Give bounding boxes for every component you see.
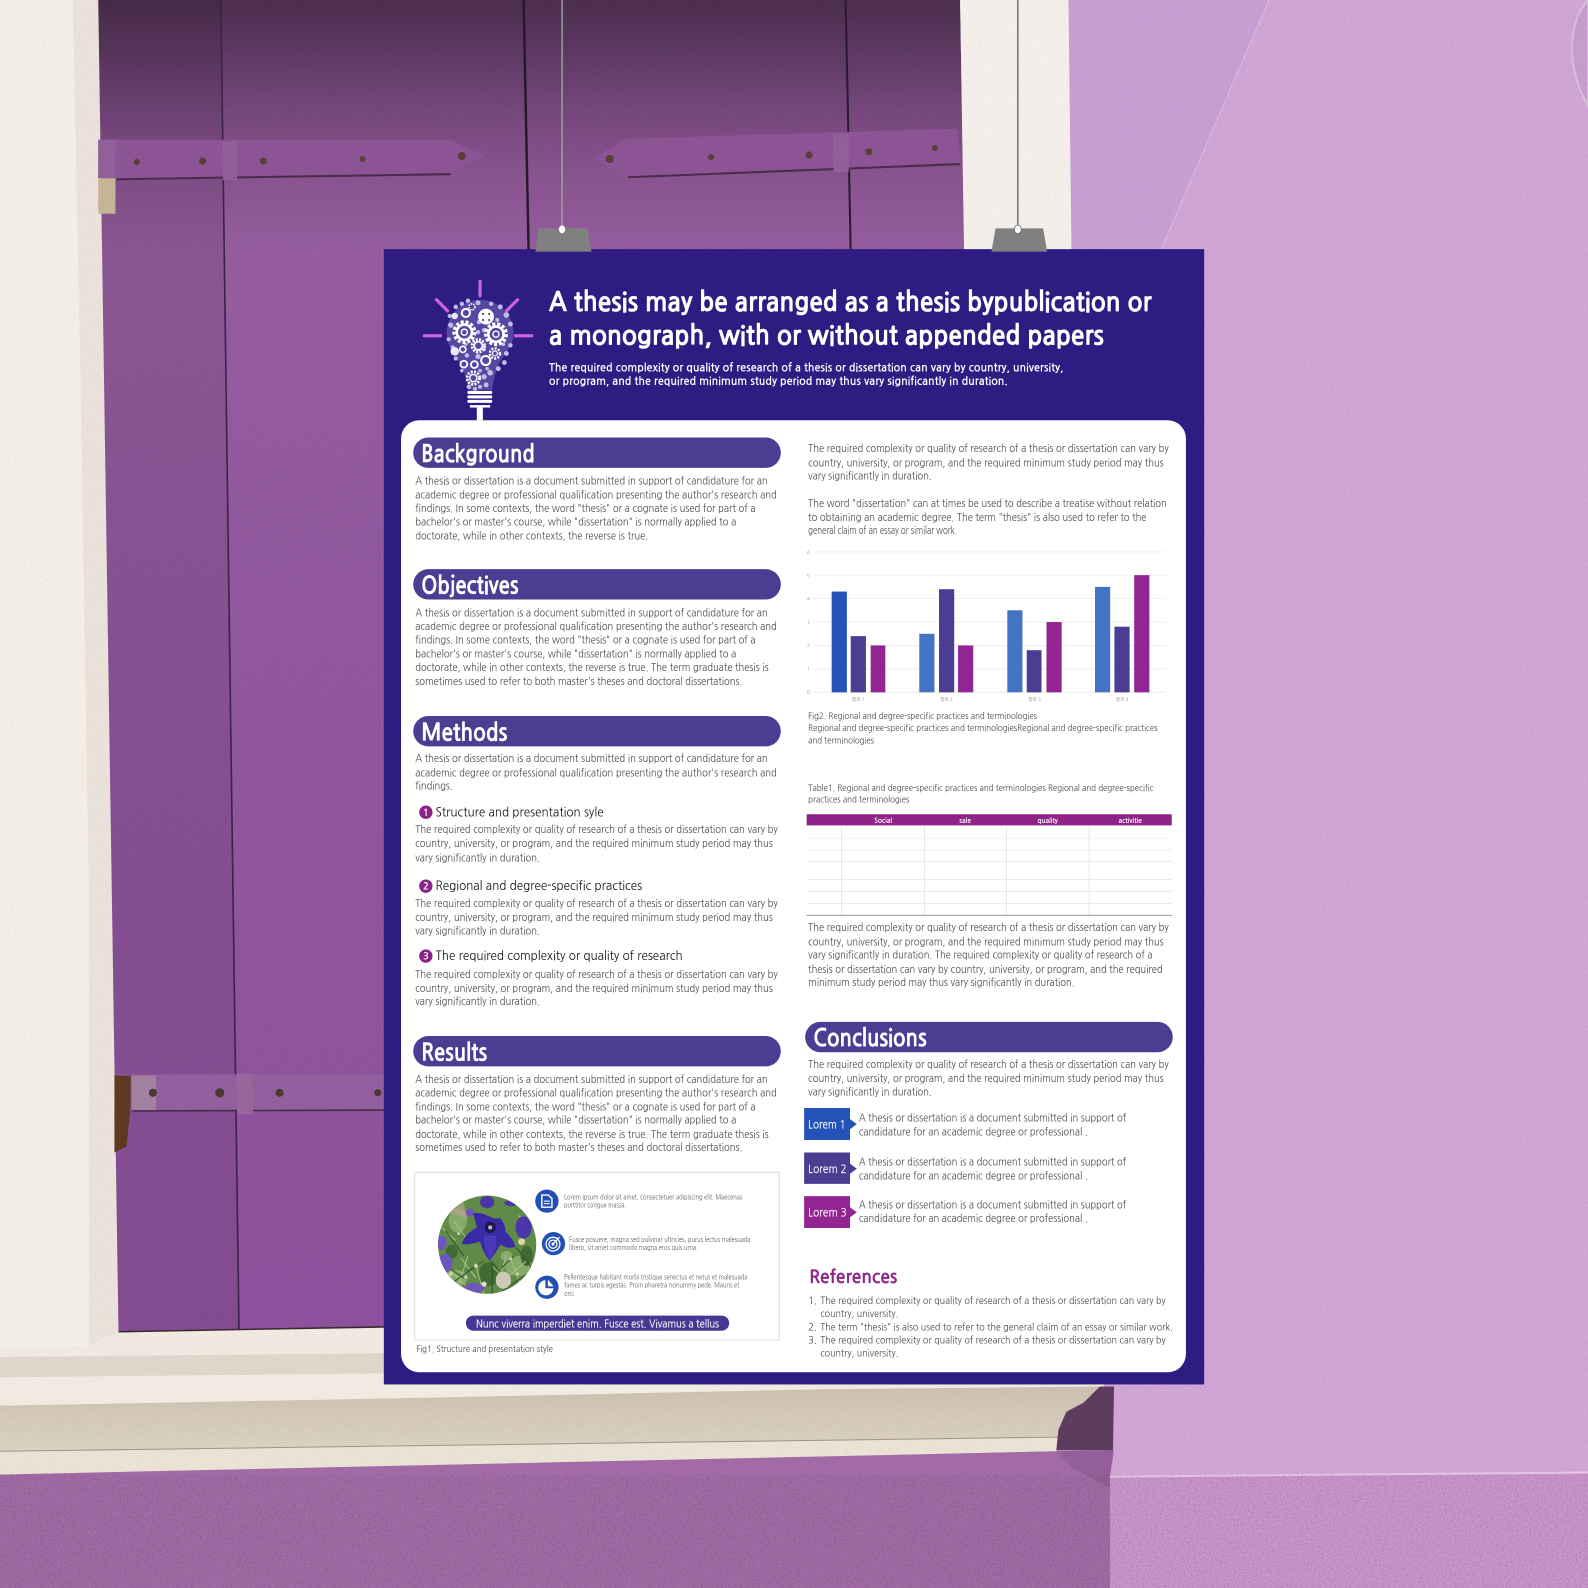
poster panel (384, 249, 1204, 1384)
subsection 3 text: vary significantly in duration. (415, 996, 540, 1007)
icon: pie chart (535, 1276, 559, 1299)
text: right intro paragraph 2: The word "dissertation" can at times be used to describe a treatise without relation (808, 498, 1167, 509)
text: Objectives body: bachelor's or master's course, while "dissertation" is normally applied to a (415, 648, 736, 659)
text: item 1 (564, 1194, 742, 1209)
text: Background body: doctorate, while in other contexts, the reverse is true. (415, 530, 648, 541)
bar chart: 항목 3 (1028, 697, 1041, 702)
subtitle (549, 362, 1063, 387)
callout: Lorem 3: candidature for an academic degree or professional . (859, 1213, 1088, 1224)
text: item 3: orci. (564, 1290, 575, 1297)
text: right intro paragraph 1 (808, 443, 1169, 482)
subsection 1 text: country, university, or program, and the required minimum study period may thus (415, 838, 773, 849)
text: item 3 (564, 1274, 748, 1297)
bar chart: 항목 1 (852, 697, 865, 702)
text: right intro paragraph 2: general claim of an essay or similar work. (808, 525, 957, 536)
subsection 1 heading: 1 (423, 808, 429, 818)
subsection 1 text: The required complexity or quality of research of a thesis or dissertation can vary by (415, 824, 778, 835)
section: Conclusions (804, 1022, 1173, 1228)
reference list: country, university. (820, 1349, 898, 1359)
subtitle: The required complexity or quality of research of a thesis or dissertation can vary by country, university, (549, 362, 1063, 374)
caption: Fig1: Fig1. Structure and presentation style (416, 1345, 553, 1354)
bar chart: 항목 4 (1116, 697, 1129, 702)
callout: Lorem 2: A thesis or dissertation is a document submitted in support of (859, 1157, 1126, 1168)
icon: target (542, 1232, 565, 1255)
text: below table: The required complexity or quality of research of a thesis or dissertation can vary by (808, 922, 1169, 933)
heading: Objectives (413, 569, 781, 600)
heading: Conclusions: Conclusions (813, 1027, 927, 1050)
subsection 3 text: The required complexity or quality of research of a thesis or dissertation can vary by (415, 969, 778, 980)
subsection 3 heading: The required complexity or quality of research (435, 949, 683, 962)
text: Conclusions intro: country, university, or program, and the required minimum study period may thus (808, 1073, 1164, 1084)
text: Results body: A thesis or dissertation is a document submitted in support of candidature for an (415, 1074, 768, 1085)
icon: document (535, 1189, 559, 1213)
text: Methods intro (415, 753, 777, 791)
title: a monograph, with or without appended papers (549, 322, 1104, 348)
callout: Lorem 2 (804, 1153, 1126, 1184)
text: Conclusions intro: vary significantly in duration. (808, 1086, 932, 1097)
reference list: The required complexity or quality of research of a thesis or dissertation can vary by (820, 1295, 1166, 1306)
text: Conclusions intro: The required complexity or quality of research of a thesis or dissertation can vary by (808, 1059, 1169, 1070)
heading: Results (413, 1036, 781, 1066)
text: Conclusions intro (808, 1059, 1169, 1097)
table: Social (874, 817, 892, 824)
subsection 2 heading: Regional and degree-specific practices (435, 879, 642, 892)
callout: Lorem 2: candidature for an academic degree or professional . (859, 1170, 1088, 1181)
text: Background body: findings. In some contexts, the word "thesis" or a cognate is used for part of a (415, 503, 756, 514)
text: Background body: academic degree or professional qualification presenting the author's research and (415, 489, 777, 500)
bar chart: 5 (807, 573, 810, 578)
text: Objectives body: A thesis or dissertation is a document submitted in support of candidature for an (415, 607, 768, 618)
text: Methods intro: findings. (415, 780, 453, 791)
table: activitie (1119, 817, 1142, 824)
text: Background body: bachelor's or master's course, while "dissertation" is normally applied to a (415, 517, 736, 528)
reference list: 3. (808, 1335, 817, 1345)
text: Results body: bachelor's or master's course, while "dissertation" is normally applied to a (415, 1115, 736, 1126)
reference list: The term "thesis" is also used to refer to the general claim of an essay or similar work. (820, 1321, 1173, 1332)
bar chart: 0 (807, 690, 810, 695)
caption: Fig2: Regional and degree-specific practices and terminologiesRegional and degree-specific practices (808, 724, 1158, 733)
text: Results body: academic degree or professional qualification presenting the author's research and (415, 1087, 777, 1098)
section: Methods (413, 716, 781, 1007)
white content card (401, 420, 1186, 1372)
text: item 2 (569, 1236, 751, 1251)
bar chart: 4 (807, 597, 810, 602)
heading: References: References (809, 1268, 897, 1286)
text: item 1: Lorem ipsum dolor sit amet, consectetuer adipiscing elit. Maecenas (564, 1194, 742, 1201)
text: Background body (415, 476, 777, 541)
text: Results body: findings. In some contexts, the word "thesis" or a cognate is used for part of a (415, 1101, 756, 1112)
heading: Conclusions (805, 1022, 1173, 1052)
text: Methods intro: A thesis or dissertation is a document submitted in support of candidature for an (415, 753, 768, 764)
text: Background body: A thesis or dissertation is a document submitted in support of candidature for an (415, 476, 768, 487)
text: below table: country, university, or program, and the required minimum study period may thus (808, 936, 1164, 947)
text: right intro paragraph 1: vary significantly in duration. (808, 471, 932, 482)
caption: Table1: Table1. Regional and degree-specific practices and terminologies Regional and degree-specific (808, 784, 1154, 793)
callout: Lorem 1: Lorem 1 (808, 1119, 846, 1131)
text: Results body: doctorate, while in other contexts, the reverse is true. The term graduate thesis is (415, 1129, 769, 1140)
heading: Objectives: Objectives (421, 574, 519, 597)
callout: Lorem 1: A thesis or dissertation is a document submitted in support of (859, 1113, 1126, 1124)
subsection 2 heading: 2 (423, 882, 429, 892)
bar chart: 3 (807, 620, 810, 625)
photo: purple flower (435, 1193, 539, 1296)
title (549, 289, 1152, 348)
text: below table: thesis or dissertation can vary by country, university, or program, and the required (808, 964, 1163, 975)
hanging clip right (991, 0, 1047, 252)
caption: Fig2 (808, 712, 1158, 745)
bar chart (807, 550, 1166, 702)
text: right intro paragraph 2: to obtaining an academic degree. The term "thesis" is also used to refer to the (808, 512, 1147, 523)
subsection 1 text (415, 824, 778, 863)
text: below table: vary significantly in duration. The required complexity or quality of research of a (808, 950, 1153, 961)
text: item 3: Pellentesque habitant morbi tristique senectus et netus et malesuada (564, 1274, 748, 1281)
text: Objectives body (415, 607, 777, 687)
section: Background (413, 438, 781, 541)
subsection 3 text: country, university, or program, and the required minimum study period may thus (415, 983, 773, 994)
text: right intro paragraph 1: The required complexity or quality of research of a thesis or dissertation can vary by (808, 443, 1169, 454)
subsection 3 text (415, 969, 778, 1007)
section: References (808, 1268, 1173, 1359)
table: sale (959, 817, 971, 824)
caption: Table1 (808, 784, 1154, 805)
pill banner: Nunc viverra imperdiet enim. Fusce est. Vivamus a tellus (476, 1319, 719, 1330)
heading: Results: Results (421, 1041, 487, 1064)
bar chart: 항목 2 (940, 697, 953, 702)
heading: Methods (413, 716, 781, 746)
text: Objectives body: academic degree or professional qualification presenting the author's research and (415, 621, 777, 632)
text: Objectives body: findings. In some contexts, the word "thesis" or a cognate is used for part of a (415, 635, 756, 646)
bar chart: 1 (807, 666, 810, 671)
pill banner (466, 1316, 729, 1331)
caption: Fig2: Fig2. Regional and degree-specific practices and terminologies (808, 712, 1037, 721)
heading: Background (413, 438, 781, 468)
subsection 1 heading: Structure and presentation syle (435, 805, 604, 818)
heading: Methods: Methods (421, 721, 507, 744)
subsection 2 text: country, university, or program, and the required minimum study period may thus (415, 912, 773, 923)
callout: Lorem 3 (804, 1196, 1126, 1228)
text: Objectives body: sometimes used to refer to both master's theses and doctoral dissertations. (415, 676, 742, 687)
text: right intro paragraph 2 (808, 498, 1167, 536)
hanging clip left (535, 0, 591, 252)
subsection 2 text: The required complexity or quality of research of a thesis or dissertation can vary by (415, 898, 778, 909)
callout: Lorem 3: Lorem 3 (808, 1206, 847, 1218)
text: below table: minimum study period may thus vary significantly in duration. (808, 977, 1075, 988)
callout: Lorem 2: Lorem 2 (808, 1163, 847, 1175)
reference list: The required complexity or quality of research of a thesis or dissertation can vary by (820, 1334, 1166, 1345)
reference list (808, 1295, 1173, 1359)
text: below table (808, 922, 1169, 988)
text: Objectives body: doctorate, while in other contexts, the reverse is true. The term graduate thesis is (415, 662, 769, 673)
reference list: country, university. (820, 1309, 898, 1319)
lightbulb icon with gears (424, 282, 532, 420)
text: Results body: sometimes used to refer to both master's theses and doctoral dissertations. (415, 1142, 742, 1153)
caption: Table1: practices and terminologies (808, 796, 910, 805)
bar chart: 6 (807, 550, 810, 555)
text: Results body (415, 1074, 777, 1153)
text: item 2: libero, sit amet commodo magna eros quis urna. (569, 1244, 698, 1251)
table (807, 814, 1172, 916)
section: Results (413, 1036, 781, 1153)
subsection 3 heading: 3 (423, 952, 429, 962)
figure 1 panel (415, 1172, 779, 1340)
callout: Lorem 1: candidature for an academic degree or professional . (859, 1126, 1088, 1137)
table: quality (1037, 817, 1059, 824)
text: item 2: Fusce posuere, magna sed pulvinar ultricies, purus lectus malesuada (569, 1236, 751, 1243)
text: Methods intro: academic degree or professional qualification presenting the author's research and (415, 767, 777, 778)
callout: Lorem 1 (804, 1108, 1126, 1140)
subtitle: or program, and the required minimum study period may thus vary significantly in duration. (549, 375, 1008, 387)
title: A thesis may be arranged as a thesis bypublication or (549, 289, 1152, 315)
reference list: 2. (808, 1322, 817, 1332)
caption: Fig2: and terminologies (808, 736, 874, 745)
heading: Background: Background (421, 443, 535, 466)
text: item 3: fames ac turpis egestas. Proin pharetra nonummy pede. Mauris et (564, 1282, 740, 1289)
text: item 1: porttitor congue massa. (564, 1202, 626, 1209)
section: Objectives (413, 569, 781, 687)
bar chart: 2 (807, 643, 810, 648)
subsection 2 text: vary significantly in duration. (415, 925, 540, 936)
subsection 2 text (415, 898, 778, 936)
subsection 1 text: vary significantly in duration. (415, 852, 540, 863)
text: right intro paragraph 1: country, university, or program, and the required minimum study period may thus (808, 457, 1164, 468)
reference list: 1. (808, 1296, 817, 1306)
callout: Lorem 3: A thesis or dissertation is a document submitted in support of (859, 1200, 1126, 1211)
